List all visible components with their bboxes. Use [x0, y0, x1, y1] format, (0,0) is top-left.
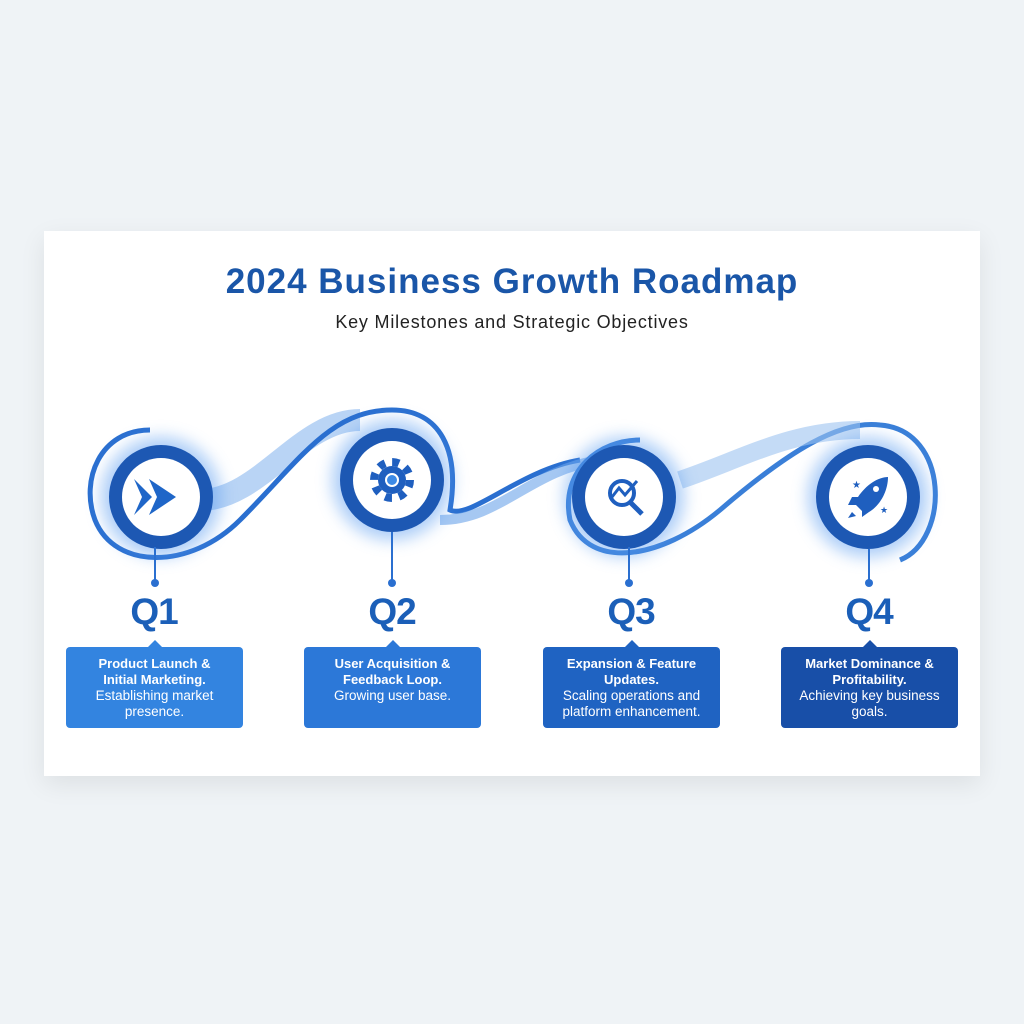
box Q3: Scaling operations and [563, 688, 700, 703]
box Q2: User Acquisition & [335, 656, 450, 671]
node Q4: ★ [880, 505, 888, 515]
subtitle: Key Milestones and Strategic Objectives [335, 312, 689, 332]
box Q4 [781, 647, 958, 728]
card [44, 231, 980, 776]
box Q1: Establishing market [96, 688, 213, 703]
node Q3 [564, 437, 684, 587]
title: 2024 Business Growth Roadmap [226, 262, 798, 301]
label Q4: Q4 [845, 591, 893, 632]
box Q2: Growing user base. [334, 688, 451, 703]
box Q4: Achieving key business [799, 688, 940, 703]
box Q1: presence. [125, 704, 184, 719]
box Q2: Feedback Loop. [343, 672, 442, 687]
box Q3: Expansion & Feature [567, 656, 696, 671]
box Q1: Product Launch & [99, 656, 210, 671]
label Q2: Q2 [368, 591, 416, 632]
node Q1 [101, 437, 221, 587]
wave ribbon [90, 410, 935, 560]
box Q4: Market Dominance & [805, 656, 934, 671]
box Q3: platform enhancement. [562, 704, 701, 719]
node Q4 [808, 437, 928, 587]
box Q1 [66, 647, 243, 728]
node Q2 [332, 420, 452, 587]
label Q1: Q1 [130, 591, 178, 632]
node Q4: ★ [852, 480, 861, 491]
label Q3: Q3 [607, 591, 655, 632]
box Q4: goals. [851, 704, 888, 719]
box Q3 [543, 647, 720, 728]
box Q2 [304, 647, 481, 728]
box Q3: Updates. [604, 672, 659, 687]
box Q1: Initial Marketing. [103, 672, 206, 687]
box Q4: Profitability. [832, 672, 907, 687]
